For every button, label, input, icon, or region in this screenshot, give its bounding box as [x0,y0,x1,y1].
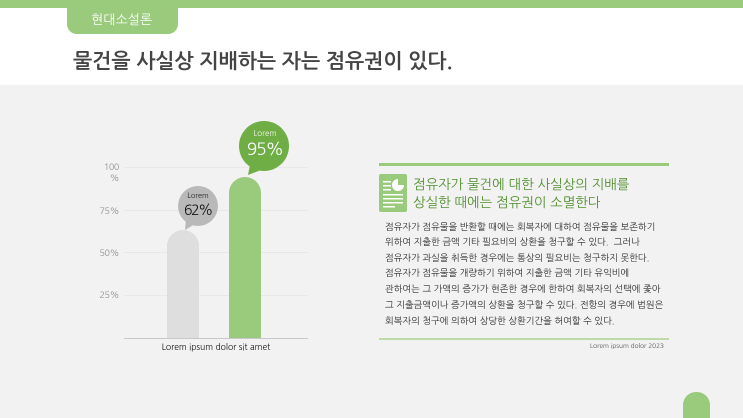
corner tab [683,392,710,418]
bar: 62% [167,230,199,338]
body text: 점유자가 점유물을 반환할 때에는 회복자에 대하여 점유물을 보존하기 [385,223,655,232]
section tab: 현대소설론 [91,13,152,26]
axis label 50%: 50% [99,249,119,258]
x-axis label: Lorem ipsum dolor sit amet [162,344,270,352]
axis label 100%: % [110,174,119,183]
subheading [413,178,629,209]
caption: Lorem ipsum dolor 2023 [590,342,664,349]
bar chart [99,121,308,352]
title: 물건을 사실상 지배하는 자는 점유권이 있다. [73,52,453,72]
bottom rule [379,338,669,340]
section tab [67,8,178,34]
icon: document with chart [379,174,407,212]
body text [385,222,664,326]
axis label 75%: 75% [99,207,119,216]
header band [0,0,743,85]
body text: 그 지출금액이나 증가액의 상환을 청구할 수 있다. 전항의 경우에 법원은 [385,301,663,310]
bubble: 95% [239,121,289,175]
bubble: 62%: 62% [184,204,212,218]
bubble: 62% [178,186,218,230]
axis label 100%: 100 [104,163,119,172]
bar: 95% [229,177,261,338]
top rule [379,163,669,166]
top green bar [0,0,743,8]
body text: 점유자가 점유물을 개량하기 위하여 지출한 금액 기타 유익비에 [385,269,629,278]
body text: 회복자의 청구에 의하여 상당한 상환기간을 허여할 수 있다. [385,317,615,326]
bubble: 62%: Lorem [187,193,209,200]
axis label 25%: 25% [99,291,119,300]
body text: 점유자가 과실을 취득한 경우에는 통상의 필요비는 청구하지 못한다. [385,254,649,263]
subheading: 상실한 때에는 점유권이 소멸한다 [413,196,600,209]
body text: 위하여 지출한 금액 기타 필요비의 상환을 청구할 수 있다. 그러나 [385,238,640,247]
axis label 100% [104,163,119,183]
body text: 관하여는 그 가액의 증가가 현존한 경우에 한하여 회복자의 선택에 좇아 [385,285,660,294]
subheading: 점유자가 물건에 대한 사실상의 지배를 [413,178,629,191]
bubble: 95%: Lorem [253,130,277,138]
bubble: 95%: 95% [247,141,283,158]
